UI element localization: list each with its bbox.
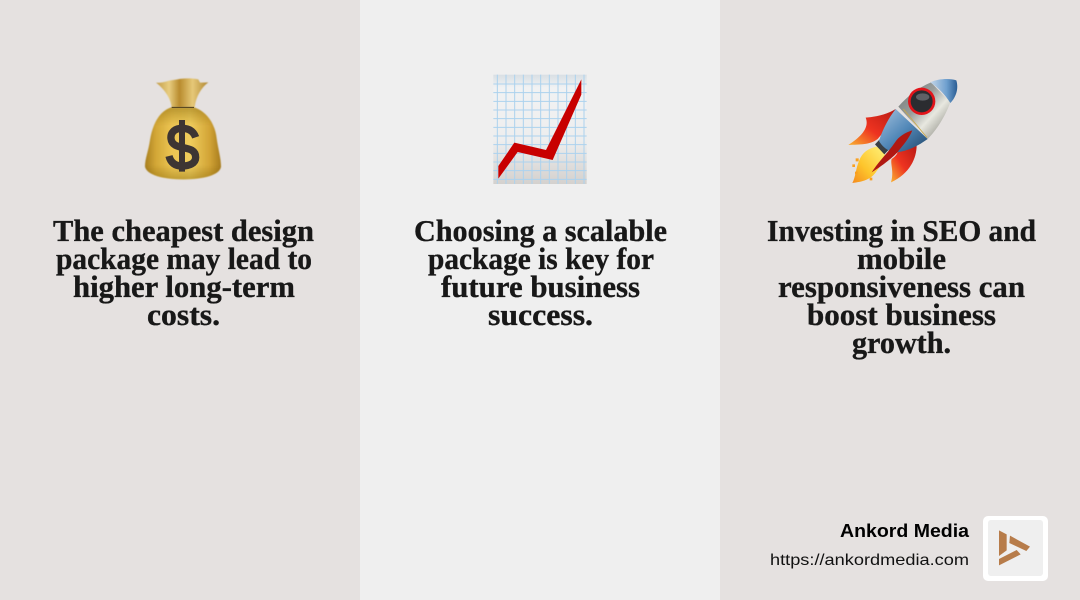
dollar sign — [169, 120, 196, 172]
heading: SEO and mobile — [767, 213, 1036, 360]
heading: scalable package: success. — [488, 297, 593, 332]
logo — [983, 516, 1048, 581]
brand name: Ankord Media — [840, 521, 970, 541]
heading: SEO and mobile: boost business — [807, 297, 996, 332]
panel: SEO and mobile — [720, 0, 1080, 600]
icon: chart with upward trend — [493, 75, 587, 184]
heading: scalable package: package is key for — [428, 241, 654, 276]
heading: SEO and mobile: mobile — [857, 241, 946, 276]
icon: money bag — [145, 78, 221, 179]
heading: scalable package: Choosing a scalable — [414, 213, 667, 248]
heading: SEO and mobile: Investing in SEO and — [767, 213, 1036, 248]
porthole — [908, 88, 935, 115]
heading: scalable package — [414, 213, 667, 332]
heading: cheapest package: higher long-term — [73, 269, 295, 304]
center fin — [872, 130, 912, 172]
panel: scalable package — [360, 0, 720, 600]
heading: cheapest package: The cheapest design — [53, 213, 314, 248]
brand url: https://ankordmedia.com — [770, 552, 969, 569]
panel: cheapest package — [0, 0, 360, 600]
heading: scalable package: future business — [441, 269, 640, 304]
icon: rocket — [848, 79, 957, 183]
heading: cheapest package: costs. — [147, 297, 220, 332]
heading: SEO and mobile: responsiveness can — [778, 269, 1025, 304]
heading: SEO and mobile: growth. — [852, 325, 951, 360]
heading: cheapest package: package may lead to — [56, 241, 312, 276]
heading: cheapest package — [53, 213, 314, 332]
